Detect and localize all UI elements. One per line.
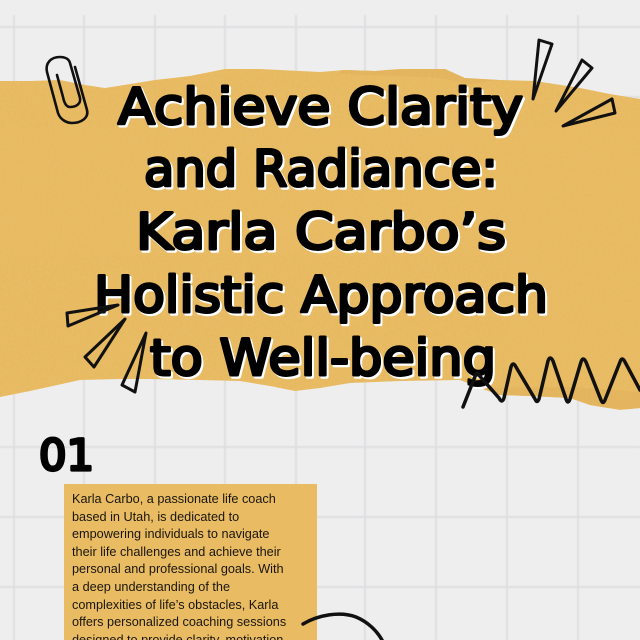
title: and Radiance: <box>144 140 498 198</box>
icon: curved line <box>303 614 382 640</box>
panel: paragraph <box>64 484 317 640</box>
paragraph text: offers personalized coaching sessions <box>72 615 286 629</box>
number 01: 01 <box>39 431 94 481</box>
title: Karla Carbo’s <box>138 205 508 263</box>
title: Achieve Clarity <box>118 78 523 136</box>
icon: zigzag <box>463 358 640 407</box>
paragraph text: personal and professional goals. With <box>72 562 284 576</box>
title <box>94 78 550 389</box>
icon: top right burst <box>533 40 615 126</box>
title: and Radiance: <box>146 142 500 200</box>
paragraph text: empowering individuals to navigate <box>72 527 269 541</box>
paragraph text <box>72 492 287 640</box>
title: Karla Carbo’s <box>136 203 506 261</box>
title: to Well-being <box>152 331 498 389</box>
panel: torn paper banner <box>0 60 640 420</box>
paragraph text: based in Utah, is dedicated to <box>72 510 239 524</box>
icon: paperclip <box>47 57 87 123</box>
paragraph text: Karla Carbo, a passionate life coach <box>72 492 276 506</box>
paragraph text: their life challenges and achieve their <box>72 545 281 559</box>
paragraph text: a deep understanding of the <box>72 580 230 594</box>
title: Holistic Approach <box>96 268 550 326</box>
paragraph text: complexities of life’s obstacles, Karla <box>72 598 278 612</box>
title: Achieve Clarity <box>120 80 525 138</box>
title: to Well-being <box>150 329 496 387</box>
title: Holistic Approach <box>94 266 548 324</box>
icon: left burst <box>67 305 146 392</box>
